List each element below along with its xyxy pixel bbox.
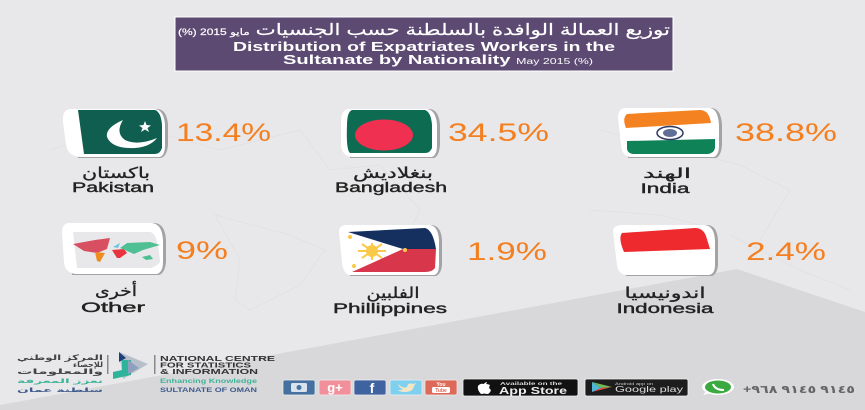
panel: Bangladesh <box>335 109 549 195</box>
percentage: Bangladesh: 34.5% <box>448 119 549 147</box>
Arabic title: توزيع العمالة الوافدة بالسلطنة حسب الجنسيات مايو 2015 (%) <box>178 22 670 40</box>
icon: WhatsApp <box>702 379 734 395</box>
percentage: Pakistan: 13.4% <box>176 119 271 147</box>
social icons <box>283 380 457 396</box>
label: India English: India <box>640 180 690 196</box>
logo Arabic text: نعزز المعرفة <box>17 378 103 385</box>
label: Indonesia English: Indonesia <box>616 300 714 316</box>
badge: Google Play <box>585 379 688 396</box>
panel: Pakistan <box>63 109 271 195</box>
percentage: India: 38.8% <box>735 119 837 147</box>
label: Pakistan English: Pakistan <box>72 179 154 195</box>
icon: Twitter <box>390 380 422 395</box>
icon: apple <box>478 382 491 394</box>
icon: Google Plus: g+ <box>327 380 343 395</box>
logo Arabic text: والمعلومات <box>17 367 104 376</box>
logo Arabic text: المركز الوطني <box>17 353 103 362</box>
logo English text: Enhancing Knowledge <box>160 378 258 385</box>
icon: Google Plus <box>319 380 351 395</box>
badge: App Store: Available on the <box>500 381 563 386</box>
badge: Google Play: Android app on <box>615 381 653 386</box>
logo Arabic text: للإحصاء <box>73 360 103 369</box>
percentage: Other: 9% <box>176 237 228 265</box>
label: Pakistan Arabic: باكستان <box>82 165 150 182</box>
flag: Bangladesh <box>341 109 440 158</box>
badge: App Store <box>463 379 578 397</box>
flag: Pakistan <box>63 109 168 158</box>
label: Other English: Other <box>81 299 146 315</box>
label: Indonesia Arabic: اندونيسيا <box>624 285 706 302</box>
logo Arabic text <box>17 353 104 394</box>
label: Philippines English: Phillippines <box>333 300 447 316</box>
label: Bangladesh English: Bangladesh <box>335 179 447 195</box>
label: Bangladesh Arabic: بنغلاديش <box>353 165 433 182</box>
icon: YouTube <box>425 380 457 395</box>
logo: National Centre for Statistics and Information <box>17 352 275 394</box>
logo mark <box>113 352 148 379</box>
logo English text: & INFORMATION <box>160 367 258 376</box>
logo Arabic text: سلطنة عمان <box>17 387 103 394</box>
flag: Indonesia <box>613 225 718 276</box>
background world map <box>50 125 850 310</box>
crescent <box>107 120 157 148</box>
badge: Google Play: Google play <box>615 385 683 394</box>
English title line 1: Distribution of Expatriates Workers in the <box>233 39 615 54</box>
logo English text <box>160 354 275 394</box>
logo English text: NATIONAL CENTRE <box>160 354 275 363</box>
logo English text: FOR STATISTICS <box>160 360 251 370</box>
icon: Instagram <box>283 380 315 395</box>
label: Philippines Arabic: الفلبين <box>366 285 420 302</box>
icon: YouTube: You <box>436 382 446 388</box>
footer background shape <box>0 269 865 410</box>
flag: India <box>618 108 722 158</box>
badge: App Store: App Store <box>499 386 568 397</box>
percentage: Philippines: 1.9% <box>467 238 547 266</box>
logo English text: SULTANATE OF OMAN <box>160 388 257 394</box>
panel: Indonesia <box>613 225 826 316</box>
icon: Facebook <box>354 380 386 396</box>
star <box>139 121 151 132</box>
percentage: Indonesia: 2.4% <box>746 238 826 266</box>
label: India Arabic: الهند <box>643 165 691 182</box>
icon: Facebook: f <box>370 380 375 396</box>
icon: play triangle <box>592 382 612 392</box>
panel: Other <box>62 223 228 315</box>
title banner <box>175 17 673 71</box>
English title line 2: Sultanate by Nationality May 2015 (%) <box>283 52 594 67</box>
panel: Philippines <box>333 225 547 316</box>
phone number: +٩٦٨ ٩١٤٥ ٩١٤٥ <box>743 384 855 396</box>
flag: Philippines <box>339 225 442 276</box>
panel: India <box>618 108 837 196</box>
flag: Other <box>62 223 166 275</box>
label: Other Arabic: أخرى <box>95 281 137 300</box>
icon: YouTube: Tube <box>435 388 447 394</box>
